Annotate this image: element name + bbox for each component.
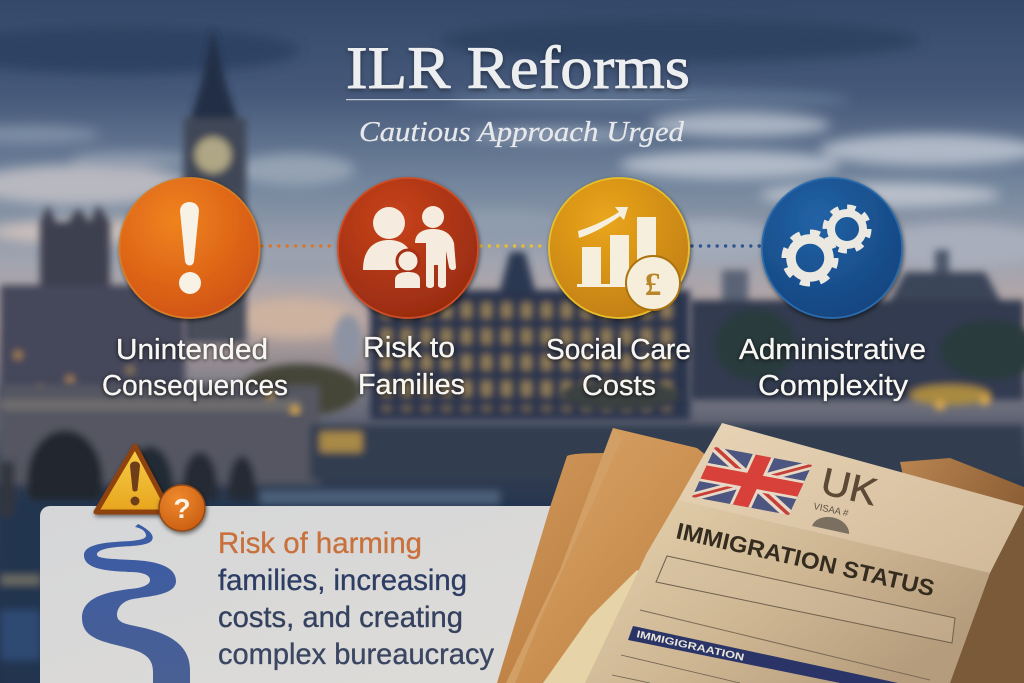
label: Risk to Families [358, 332, 465, 401]
icon: family badge [338, 178, 478, 318]
Westminster towers left [0, 205, 185, 415]
right folder [900, 458, 1024, 683]
visa stamp: VISAA # [812, 501, 850, 519]
connector: orange dots [262, 244, 337, 248]
icon: social care costs badge [549, 178, 689, 318]
river [0, 462, 560, 683]
icon: administrative complexity badge [762, 178, 902, 318]
panel text: Risk of harming [218, 527, 422, 560]
form lines [612, 655, 740, 683]
front left folder [506, 428, 725, 683]
panel text [218, 527, 494, 671]
Big Ben [184, 28, 246, 343]
label: Administrative Complexity: Administrative [739, 334, 926, 366]
cream inner sheet [543, 570, 655, 683]
back left folder [497, 453, 700, 683]
UK mark: UK [817, 461, 881, 514]
label: Risk to Families: Families [358, 369, 465, 401]
connector: blue dots [692, 244, 761, 248]
panel: risk summary [40, 506, 600, 683]
subtitle: Cautious Approach Urged [359, 117, 685, 148]
paper [585, 423, 1024, 683]
form heading: IMMIGRATION STATUS [674, 518, 937, 601]
label: Unintended Consequences [102, 334, 288, 402]
document pile: folders and immigration form [497, 423, 1024, 683]
label: Administrative Complexity: Complexity [758, 370, 909, 402]
panel text: families, increasing [218, 564, 467, 597]
label: Unintended Consequences: Unintended [116, 334, 268, 366]
panel text: complex bureaucracy [218, 638, 494, 671]
label: Unintended Consequences: Consequences [102, 370, 288, 402]
central building [334, 252, 690, 420]
label: Social Care Costs: Costs [582, 370, 656, 402]
clouds [0, 18, 1024, 338]
label: Administrative Complexity [739, 334, 926, 402]
icon: union jack flag [692, 447, 812, 515]
icon: warning triangle with question mark [96, 446, 205, 531]
label: Social Care Costs: Social Care [546, 334, 691, 366]
icon: warning triangle with question mark: ? [173, 493, 191, 524]
navy form band [628, 626, 898, 683]
title rule [346, 99, 702, 100]
visa stamp [812, 501, 850, 534]
form field [656, 556, 955, 643]
navy form band: IMMIGIGRAATION [635, 629, 745, 664]
icon: unintended consequences badge [120, 178, 260, 318]
label: Risk to Families: Risk to [363, 332, 455, 364]
title: ILR Reforms [346, 35, 690, 101]
icon: social care costs badge: £ [645, 267, 661, 303]
right skyline and trees [240, 250, 1024, 416]
connector: yellow dots [481, 244, 548, 248]
street lights [266, 391, 990, 415]
bridge [0, 385, 1024, 534]
label: Social Care Costs [546, 334, 691, 402]
panel text: costs, and creating [218, 601, 463, 634]
icon: winding path [82, 524, 190, 683]
